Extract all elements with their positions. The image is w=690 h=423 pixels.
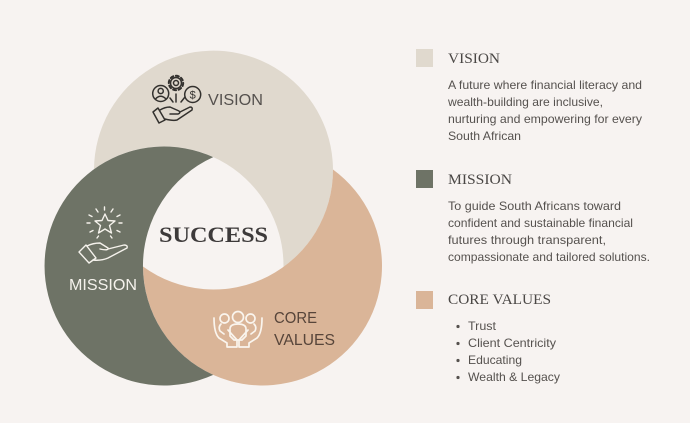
label: core values: CORE [274, 310, 317, 327]
text block: vision: South African [448, 129, 521, 143]
circle segment: mission [45, 146, 213, 386]
list: core values: Trust [468, 319, 497, 333]
icon: hand with people, gear and dollar [153, 76, 201, 123]
icon: hand with star [79, 207, 127, 263]
text block: mission [448, 199, 650, 264]
list: core values [456, 319, 560, 384]
list: core values: Educating [468, 353, 522, 367]
venn diagram [45, 51, 382, 386]
swatch: vision [416, 49, 433, 67]
icon: dollar sign: $ [190, 90, 196, 102]
text block: mission: compassionate and tailored solutions. [448, 250, 650, 264]
heading: vision: VISION [448, 51, 500, 67]
legend: vision [416, 49, 642, 143]
heading: core values: CORE VALUES [448, 292, 551, 308]
circle segment: core values [143, 170, 382, 385]
label: vision: VISION [208, 92, 263, 109]
text block: mission: To guide South Africans toward [448, 199, 621, 213]
text block: mission: confident and sustainable financial [448, 216, 633, 230]
circle segment: vision [94, 51, 333, 267]
text block: vision: wealth-building are inclusive, [447, 95, 603, 109]
list: core values: Wealth & Legacy [468, 370, 560, 384]
heading: mission: MISSION [448, 172, 512, 188]
text block: vision: nurturing and empowering for every [448, 112, 642, 126]
label: core values [274, 310, 335, 349]
icon: group in hands [214, 312, 262, 347]
text block: mission: futures through transparent, [448, 233, 606, 247]
text block: vision [447, 78, 642, 143]
label: mission: MISSION [69, 277, 137, 294]
label: success: SUCCESS [159, 222, 268, 247]
swatch: mission [416, 170, 433, 188]
swatch: core values [416, 291, 433, 309]
list: core values: Client Centricity [468, 336, 556, 350]
label: core values: VALUES [274, 332, 335, 349]
legend: core values [416, 291, 560, 384]
legend: mission [416, 170, 650, 264]
text block: vision: A future where financial literacy and [448, 78, 642, 92]
